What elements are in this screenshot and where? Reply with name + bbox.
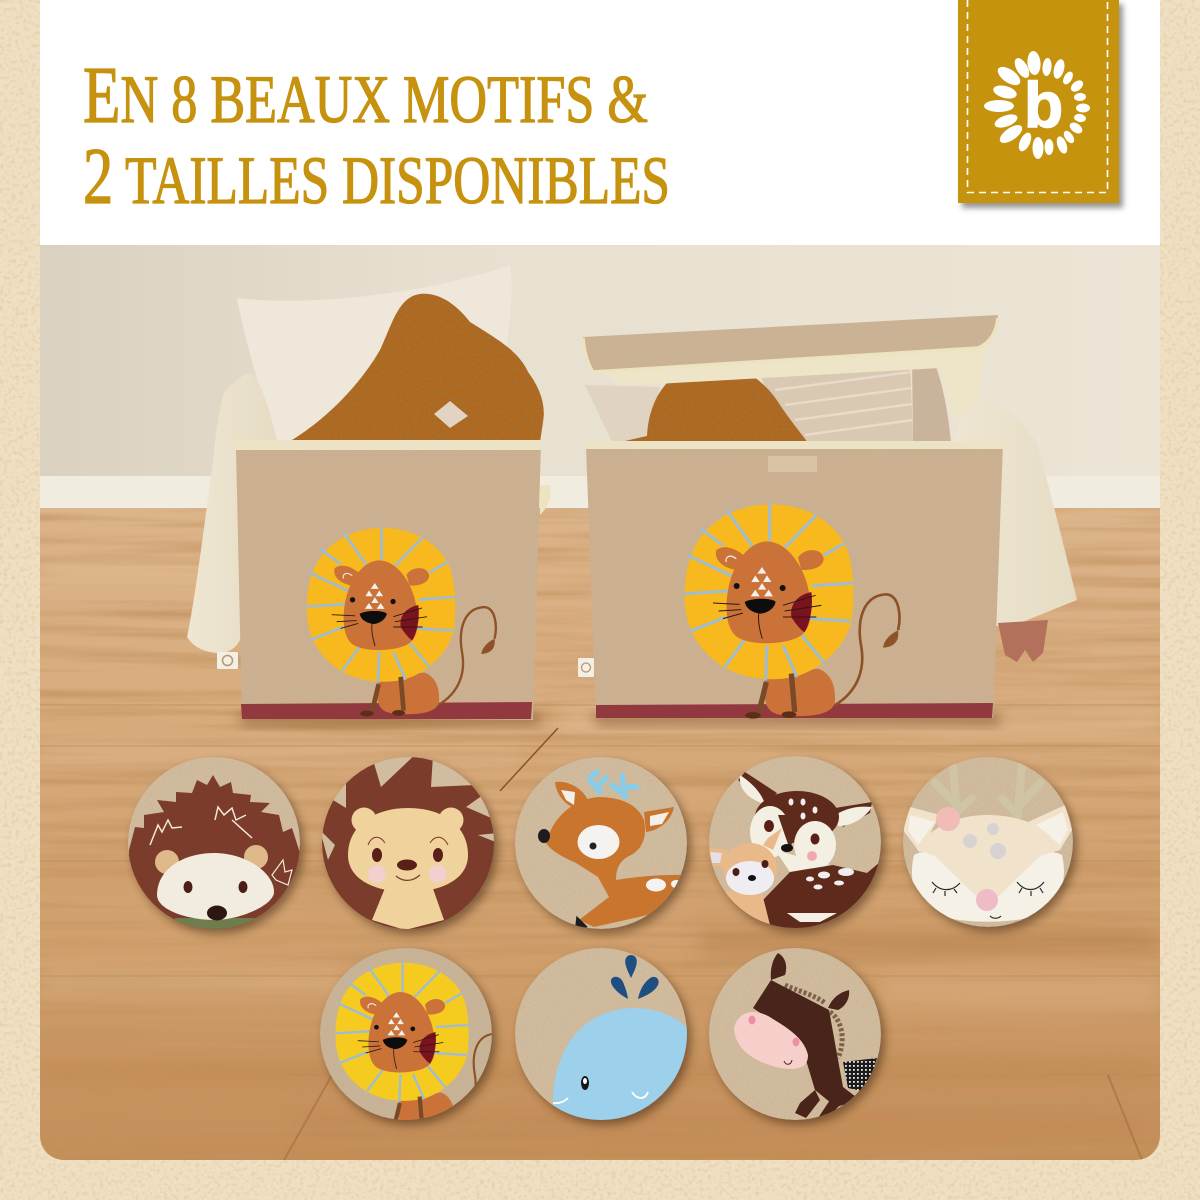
title — [83, 52, 670, 221]
panel: large storage box with lid — [578, 315, 1077, 719]
brand tag with logo — [958, 0, 1123, 208]
brown teddy pillow — [292, 294, 544, 442]
title line 1: EN 8 BEAUX MOTIFS & — [83, 52, 648, 140]
medallion: doe and fawn — [708, 756, 885, 935]
box front fabric — [586, 443, 1003, 718]
icon: flower logo — [984, 50, 1090, 159]
red base band — [241, 702, 532, 719]
brand label — [217, 652, 238, 669]
brand label — [578, 658, 594, 677]
red base band — [596, 703, 993, 718]
pillow hole — [434, 401, 468, 428]
cream pillow — [237, 265, 512, 440]
box shadows on floor — [236, 712, 1000, 726]
striped main pillow — [760, 357, 913, 443]
box front fabric — [236, 442, 541, 720]
lion appliqué — [307, 527, 496, 716]
linen side pillow — [912, 368, 951, 441]
lid trim — [583, 318, 998, 372]
lid underside — [603, 346, 988, 420]
photo scene — [40, 245, 1160, 1160]
title line 2: 2 TAILLES DISPONIBLES — [83, 133, 670, 221]
box handle — [540, 485, 551, 515]
blanket fringe — [998, 620, 1048, 662]
medallion: brown horse — [709, 948, 885, 1125]
lion appliqué — [685, 504, 899, 719]
medallion: orange fawn with blue antlers — [515, 757, 691, 934]
brown teddy pillow — [625, 378, 806, 441]
medallion: hedgehog with leaf — [128, 757, 304, 934]
panel: small storage box — [187, 265, 551, 720]
striped left pillow — [585, 385, 660, 442]
medallion: blue whale — [515, 948, 691, 1125]
box rim — [585, 441, 1003, 449]
header: white title band — [40, 0, 1160, 245]
lid top — [583, 315, 998, 372]
wall — [40, 245, 1160, 480]
medallion: lion cub with spiky mane — [320, 750, 498, 934]
medallion: sleeping deer with flower — [903, 757, 1077, 932]
knitted blanket — [996, 408, 1077, 626]
baseboard — [40, 476, 1160, 509]
icon: flower logo: b — [1024, 69, 1063, 141]
wooden floor — [40, 508, 1160, 1160]
box rim — [235, 440, 541, 450]
knitted blanket — [187, 373, 277, 653]
velcro tab — [768, 456, 817, 472]
medallion: lion — [320, 948, 505, 1132]
